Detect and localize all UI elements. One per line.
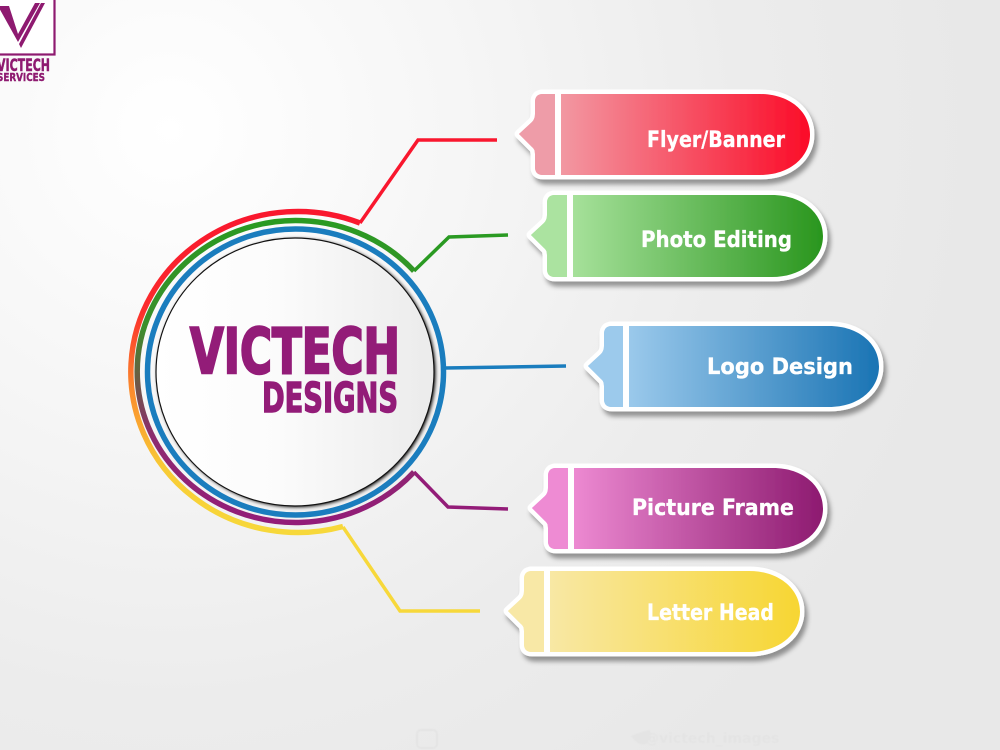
disc shadow [158,239,436,507]
connector: red line to Flyer/Banner [360,140,497,223]
logo: Victech Services [0,0,54,84]
title: VICTECH DESIGNS: VICTECH [190,315,400,388]
ring: blue [148,229,444,515]
callout: Photo Editing [531,193,823,279]
callout: Letter Head: Letter Head [647,601,774,626]
callout: Flyer/Banner [519,92,810,177]
connector: yellow line to Letter Head [343,527,480,611]
title: VICTECH DESIGNS [190,315,400,422]
title: VICTECH DESIGNS: DESIGNS [262,374,398,422]
faint footer watermark [417,730,779,748]
connector: green line to Photo Editing [414,235,508,271]
callout: Logo Design: Logo Design [707,355,853,380]
callout: Picture Frame: Picture Frame [632,496,794,521]
callout: Flyer/Banner: Flyer/Banner [647,128,785,153]
callout: Photo Editing: Photo Editing [641,228,792,253]
faint footer watermark: @victech_images [645,731,779,747]
connector: purple line to Picture Frame [414,472,508,509]
callout: Letter Head [508,569,800,654]
callout: Picture Frame [532,466,823,551]
disc [156,238,434,506]
callout: Logo Design [588,324,879,409]
ring: green to purple [137,221,414,523]
connector: blue line to Logo Design [445,366,566,368]
central circle with rings [131,211,444,532]
ring: red to yellow [131,211,360,532]
